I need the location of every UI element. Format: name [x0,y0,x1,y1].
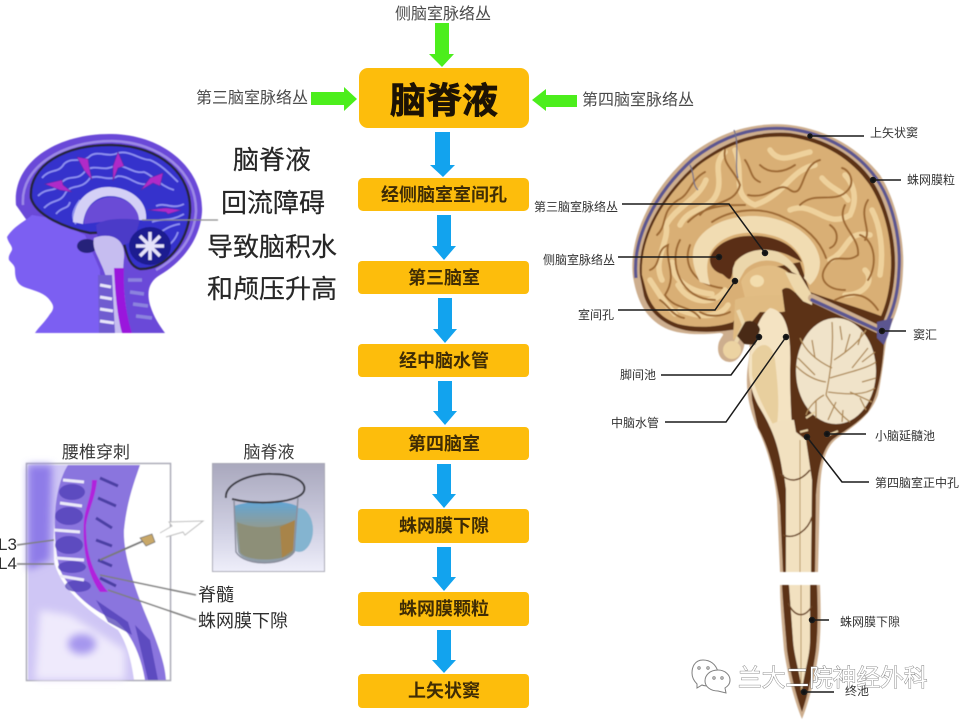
step: 上矢状窦 [358,674,529,708]
interpeduncular cistern [737,321,760,345]
arrow: blue 5 [432,464,456,508]
purple tissue spot [68,634,96,654]
spinal column lower segment [780,585,821,719]
dark tissue patch [28,465,52,570]
white sketched arrow [160,521,203,537]
outer membrane silhouette [632,124,903,572]
labels: brain anatomy: 窦汇 [913,328,937,342]
arrow: blue 2 [432,215,456,260]
third ventricle and aqueduct [782,288,808,425]
needle [100,538,150,560]
pituitary stalk and gland [723,310,744,359]
gyri dark sulci [650,150,878,318]
skull light ring [23,141,196,270]
arrow: blue 3 [433,298,457,343]
labels: brain anatomy: 蛛网膜粒 [907,172,955,187]
arrow: green from right [532,89,577,111]
label: 第三脑室脉络丛: 第三脑室脉络丛 [196,88,308,107]
labels: brain anatomy: 蛛网膜下隙 [840,614,900,629]
step: 第四脑室: 第四脑室 [408,433,480,454]
watermark: WeChat icon [692,660,730,693]
label: 第四脑室脉络丛: 第四脑室脉络丛 [582,90,694,109]
spinal cord upper [769,420,812,572]
cervical vertebrae [98,275,115,333]
vertebrae bodies [55,484,158,680]
arrow: blue 6 [432,547,456,591]
illustration: sagittal brain and spinal cord [632,124,903,719]
leader lines [100,575,196,620]
brainstem [94,236,130,333]
illustration: child head with hydrocephalus [7,134,218,333]
labels: brain anatomy: 中脑水管 [611,415,659,430]
arrow: blue 7 [432,630,456,673]
rear vertebrae [128,280,152,318]
step: 蛛网膜下隙: 蛛网膜下隙 [399,516,489,536]
arrow: blue 4 [433,381,457,425]
text block: hydrocephalus explanation: 和颅压升高 [207,274,337,304]
heading box: 脑脊液: 脑脊液 [390,80,498,121]
step: 上矢状窦: 上矢状窦 [408,680,480,701]
step: 第三脑室 [358,261,529,294]
step: 经侧脑室室间孔: 经侧脑室室间孔 [381,184,507,205]
liquid [234,502,297,562]
heading: 腰椎穿刺: 腰椎穿刺 [62,443,130,462]
labels: brain anatomy: 侧脑室脉络丛 [543,252,615,267]
corpus callosum [693,216,820,285]
shadow [285,508,313,552]
text block: hydrocephalus explanation: 导致脑积水 [207,232,337,262]
spinal sac [84,480,108,592]
skull base dark spot [77,239,97,253]
text block: hydrocephalus explanation [207,145,337,304]
labels: brain anatomy: 第三脑室脉络丛 [534,199,618,214]
pressure arrows [45,152,181,214]
brain outline ring [31,145,190,269]
gyri light folds [650,150,882,315]
cerebellum [796,318,876,424]
label: 侧脑室脉络丛: 侧脑室脉络丛 [395,4,491,23]
cerebellomedullary cistern details [800,412,838,436]
sediment tint [237,520,295,560]
illustration: beaker of CSF [212,464,324,572]
callout line [142,219,218,221]
labels: brain anatomy [534,126,959,698]
heading box: 脑脊液 [359,68,529,128]
ventricle dome [84,197,139,224]
purple venous sinus [636,128,899,326]
spinal cord [114,268,132,333]
text block: hydrocephalus explanation: 脑脊液 [233,145,311,175]
collicular plate [785,272,812,305]
fornix arch [733,250,800,282]
step: 蛛网膜颗粒: 蛛网膜颗粒 [399,598,489,619]
arrow: green from top [429,23,454,67]
subarachnoid space [640,133,895,572]
leader lines for brain labels [618,134,906,694]
arrow: blue 1 [430,132,455,177]
tentorium [812,298,884,333]
panel frame [26,464,170,680]
background tissue [28,465,134,680]
corpus callosum arc [73,187,146,224]
labels: brain anatomy: 终池 [845,683,869,698]
lateral ventricle [710,236,802,279]
L3 L4 leaders [17,540,54,564]
needle hub [140,534,155,546]
spine column [55,465,166,680]
labels: brain anatomy: 第四脑室正中孔 [875,475,959,490]
labels: brain anatomy: 小脑延髓池 [875,429,935,443]
thalamus [96,219,140,245]
photo frame [212,464,324,572]
spinous processes [96,478,118,586]
surface vessels [690,130,738,190]
step: 蛛网膜下隙 [358,509,529,543]
labels: brain anatomy: 上矢状窦 [870,126,918,140]
thalamus [741,265,800,305]
arrow: green from left [311,87,357,111]
cerebellum [129,227,171,265]
intervertebral discs [54,480,84,580]
diencephalon nucleus [750,275,764,287]
labels: lumbar puncture: 脊髓 [198,585,234,605]
step: 第四脑室 [358,427,529,460]
labels: lumbar puncture: 蛛网膜下隙 [198,611,288,631]
glass walls and rim [226,474,304,502]
cerebrum [642,137,891,327]
skull and neck silhouette [16,134,202,333]
torcular sinus [877,318,893,345]
flowchart: CSF circulation [196,4,694,708]
step: 蛛网膜颗粒 [358,592,529,626]
brainstem and pons [749,308,795,475]
step: 经中脑水管: 经中脑水管 [399,350,489,371]
step: 经中脑水管 [358,344,529,377]
nerve roots [780,470,812,536]
text block: hydrocephalus explanation: 回流障碍 [221,188,325,218]
labels: brain anatomy: 室间孔 [578,307,614,322]
midbrain tegmentum [733,295,795,340]
watermark: account name: 兰大二院神经外科 [738,665,928,692]
labels: brain anatomy: 脚间池 [620,367,656,382]
step: 第三脑室: 第三脑室 [408,267,480,288]
pale tissue patch [35,610,125,680]
illustration: lumbar puncture [17,464,203,680]
heading: 脑脊液 beaker: 脑脊液 [244,443,294,462]
step: 经侧脑室室间孔 [358,178,529,211]
gyri [38,152,184,248]
face silhouette [7,215,102,333]
labels: lumbar puncture [0,535,288,631]
